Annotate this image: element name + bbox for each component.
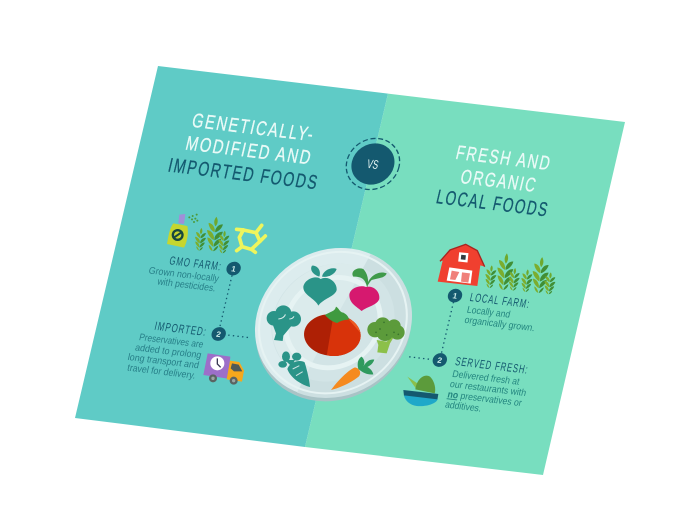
imported text: long transport and: [127, 352, 200, 371]
card content in skewed plane: [119, 109, 582, 425]
icon: pink radish: [349, 268, 387, 311]
local farm text: LOCAL FARM:: [469, 290, 532, 311]
right icons: [403, 244, 556, 406]
step 1 left: 1: [230, 264, 237, 274]
right timeline connector: [409, 298, 454, 360]
step 1 right: [446, 288, 464, 303]
plate: [239, 239, 428, 410]
step 2 left: [210, 326, 227, 342]
imported text: travel for delivery.: [126, 363, 197, 382]
step 1 left: [225, 261, 242, 276]
heading: right: FRESH AND: [454, 142, 554, 175]
served fresh text: SERVED FRESH:: [454, 354, 530, 377]
plate vegetables: [267, 266, 405, 390]
step 1 right: 1: [452, 292, 459, 301]
heading: right: [434, 141, 562, 221]
local farm text: Locally and: [466, 305, 511, 321]
heading: left: MODIFIED AND: [183, 133, 314, 169]
panel: GMO and imported foods background: [75, 66, 388, 447]
imported text: [124, 317, 208, 382]
served fresh text: our restaurants with: [449, 379, 527, 399]
served fresh text: [444, 354, 533, 419]
served fresh text: Delivered fresh at: [451, 369, 521, 388]
served fresh text: additives.: [444, 400, 482, 415]
local farm text: organically grown.: [463, 315, 536, 334]
icon: delivery truck: [203, 353, 244, 385]
heading: left: IMPORTED FOODS: [166, 155, 321, 194]
heading: left: GENETICALLY-: [190, 110, 317, 146]
GMO farm text: Grown non-locally: [147, 266, 220, 285]
served fresh text: no preservatives or: [446, 389, 523, 409]
icon: teal beet: [303, 266, 337, 306]
GMO farm text: GMO FARM:: [168, 254, 223, 273]
icon: molecule: [237, 225, 265, 252]
heading: left: [166, 109, 332, 194]
icon: local crops: [484, 253, 556, 295]
GMO farm text: [145, 251, 223, 294]
step 2 right: 2: [436, 356, 443, 365]
left timeline connector: [218, 275, 263, 338]
icon: teal carrot: [278, 351, 310, 387]
icon: green broccoli: [367, 317, 405, 353]
local farm text: [463, 290, 542, 334]
panel: fresh and organic foods background: [305, 94, 625, 475]
icon: tomato: [304, 306, 361, 356]
VS badge: [341, 136, 405, 192]
imported text: added to prolong: [134, 343, 202, 361]
icon: pesticide spray bottle: [167, 214, 198, 248]
imported text: Preservatives are: [138, 332, 205, 351]
GMO farm text: with pesticides.: [155, 277, 217, 294]
left icons: [167, 214, 265, 385]
icon: teal broccoli: [267, 305, 301, 341]
heading: right: LOCAL FOODS: [434, 187, 551, 221]
icon: red barn: [438, 244, 485, 286]
VS badge: VS: [366, 157, 380, 172]
icon: salad bowl: [403, 376, 438, 406]
step 2 left: 2: [215, 330, 222, 339]
icon: GMO crops: [194, 216, 230, 254]
icon: orange carrot: [331, 357, 374, 390]
infographic card: [75, 66, 625, 475]
step 2 right: [431, 352, 448, 368]
imported text: IMPORTED:: [153, 319, 208, 339]
heading: right: ORGANIC: [458, 166, 539, 197]
